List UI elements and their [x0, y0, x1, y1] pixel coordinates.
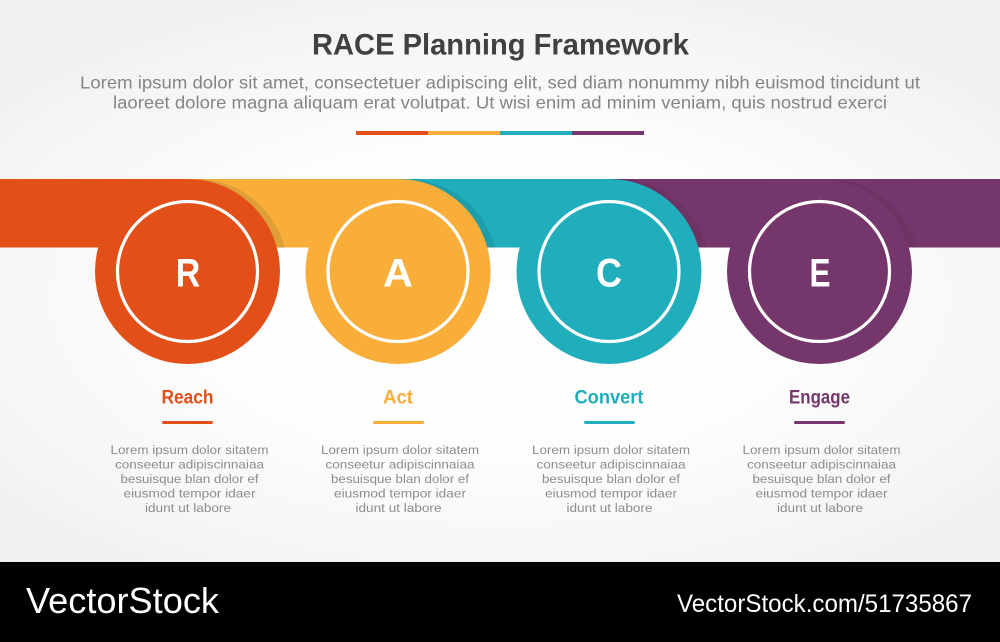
ribbon bands — [0, 179, 1000, 248]
circle: C — [516, 179, 702, 364]
intro text: laoreet dolore magna aliquam erat volutpat. Ut wisi enim ad minim veniam, quis nostrud exerci — [113, 92, 887, 112]
header — [80, 28, 920, 135]
colour rule — [356, 131, 644, 135]
circle: A: A — [383, 252, 413, 296]
footer bar — [0, 562, 1000, 642]
text: convert: besuisque blan dolor ef — [542, 472, 681, 486]
circle: E: E — [810, 252, 830, 296]
circle: E — [727, 179, 912, 364]
text: act: conseetur adipiscinnaiaa — [326, 458, 475, 472]
footer logo: VectorStock — [26, 580, 220, 621]
circle: A — [306, 179, 490, 364]
heading: convert: Convert — [574, 388, 644, 408]
underline: reach — [162, 421, 213, 424]
text: reach — [110, 443, 268, 515]
text: convert: eiusmod tempor idaer — [545, 486, 677, 500]
circle shadows — [192, 179, 495, 248]
intro text — [80, 72, 920, 112]
text: engage: conseetur adipiscinnaiaa — [747, 458, 896, 472]
intro text: Lorem ipsum dolor sit amet, consectetuer adipiscing elit, sed diam nonummy nibh euismod tincidunt ut — [80, 72, 920, 92]
text: engage — [742, 443, 900, 515]
heading: reach: Reach — [162, 388, 214, 408]
underline: engage — [794, 421, 845, 424]
text: reach: eiusmod tempor idaer — [124, 486, 256, 500]
text: convert: idunt ut labore — [566, 501, 653, 515]
circle: R — [95, 179, 280, 364]
underline: convert — [584, 421, 635, 424]
text: engage: besuisque blan dolor ef — [752, 472, 891, 486]
heading: act: Act — [383, 388, 414, 408]
title: RACE Planning Framework — [312, 28, 689, 62]
ribbon with circles — [0, 179, 1000, 364]
text: convert: Lorem ipsum dolor sitatem — [532, 443, 690, 457]
circle: R: R — [176, 252, 200, 296]
footer id: VectorStock.com/51735867 — [677, 590, 972, 618]
text: engage: Lorem ipsum dolor sitatem — [742, 443, 900, 457]
panel: reach — [110, 388, 268, 515]
panel: engage — [742, 388, 900, 515]
text: act: eiusmod tempor idaer — [334, 486, 466, 500]
circle: C: C — [596, 252, 622, 296]
text: reach: idunt ut labore — [145, 501, 231, 515]
text: act: idunt ut labore — [356, 501, 442, 515]
heading: engage: Engage — [789, 388, 850, 408]
text: reach: Lorem ipsum dolor sitatem — [110, 443, 268, 457]
text: engage: eiusmod tempor idaer — [756, 486, 888, 500]
panel: convert — [532, 388, 690, 515]
text: act: Lorem ipsum dolor sitatem — [321, 443, 479, 457]
text: engage: idunt ut labore — [777, 501, 863, 515]
underline: act — [373, 421, 424, 424]
text: reach: conseetur adipiscinnaiaa — [115, 458, 264, 472]
text: act: besuisque blan dolor ef — [331, 472, 470, 486]
text: act — [321, 443, 479, 515]
panel: act — [321, 388, 479, 515]
text: convert: conseetur adipiscinnaiaa — [536, 458, 686, 472]
text: reach: besuisque blan dolor ef — [120, 472, 259, 486]
text: convert — [532, 443, 690, 515]
